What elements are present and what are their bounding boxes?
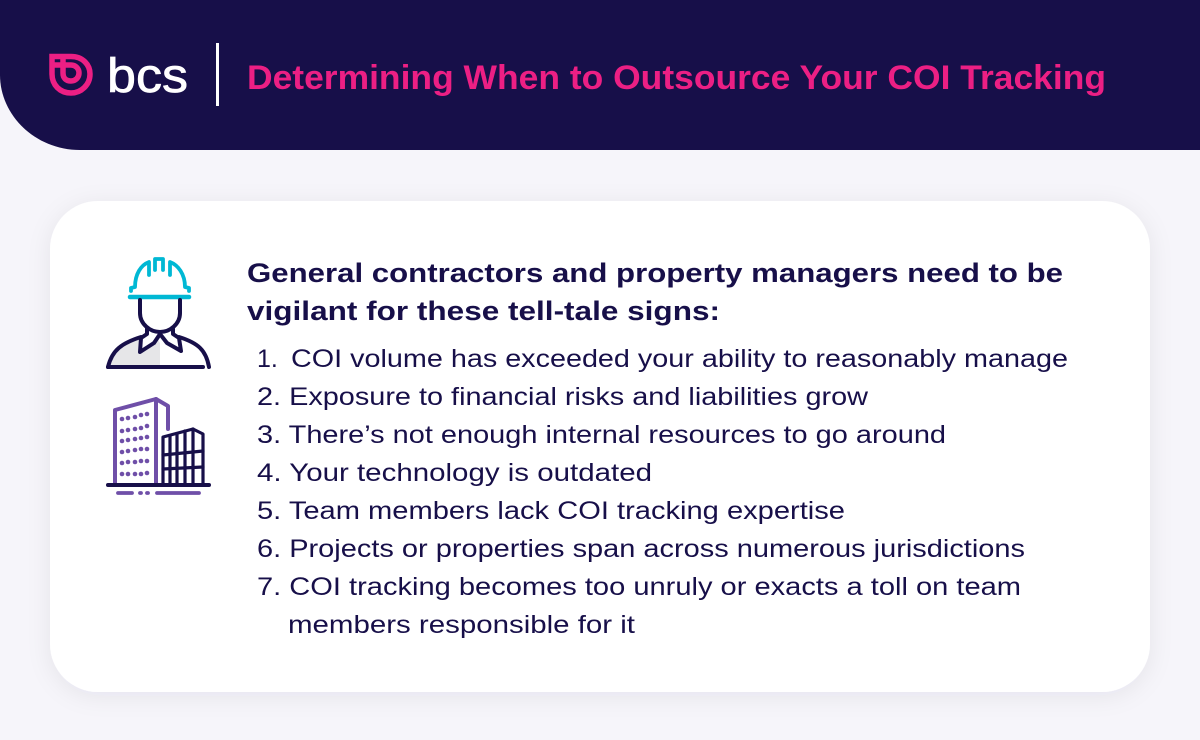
title: Determining When to Outsource Your COI Tracking [247,59,1106,97]
sign 4: 4. Your technology is outdated [257,459,652,487]
numbered list of signs [257,345,1068,639]
icon: office buildings [108,399,209,493]
icon: construction worker [108,259,209,367]
sign 1: 1. [257,345,278,373]
heading: General contractors and property managers need to be [247,258,1063,288]
header divider [216,43,219,106]
sign 7: members responsible for it [288,611,635,639]
logo wordmark: bcs [107,50,188,103]
logo [52,50,188,103]
heading [247,258,1063,326]
panel: signs card [50,201,1150,692]
sign 6: 6. Projects or properties span across numerous jurisdictions [257,535,1025,563]
icon: bcs logo mark [52,56,90,93]
sign 1: COI volume has exceeded your ability to reasonably manage [291,345,1068,373]
sign 3: 3. There’s not enough internal resources to go around [257,421,946,449]
sign 2: 2. Exposure to financial risks and liabilities grow [257,383,869,411]
heading: vigilant for these tell-tale signs: [247,296,720,326]
sign 5: 5. Team members lack COI tracking expertise [257,497,845,525]
header band [0,0,1200,150]
sign 7 [257,573,1021,639]
sign 7: 7. COI tracking becomes too unruly or exacts a toll on team [257,573,1021,601]
